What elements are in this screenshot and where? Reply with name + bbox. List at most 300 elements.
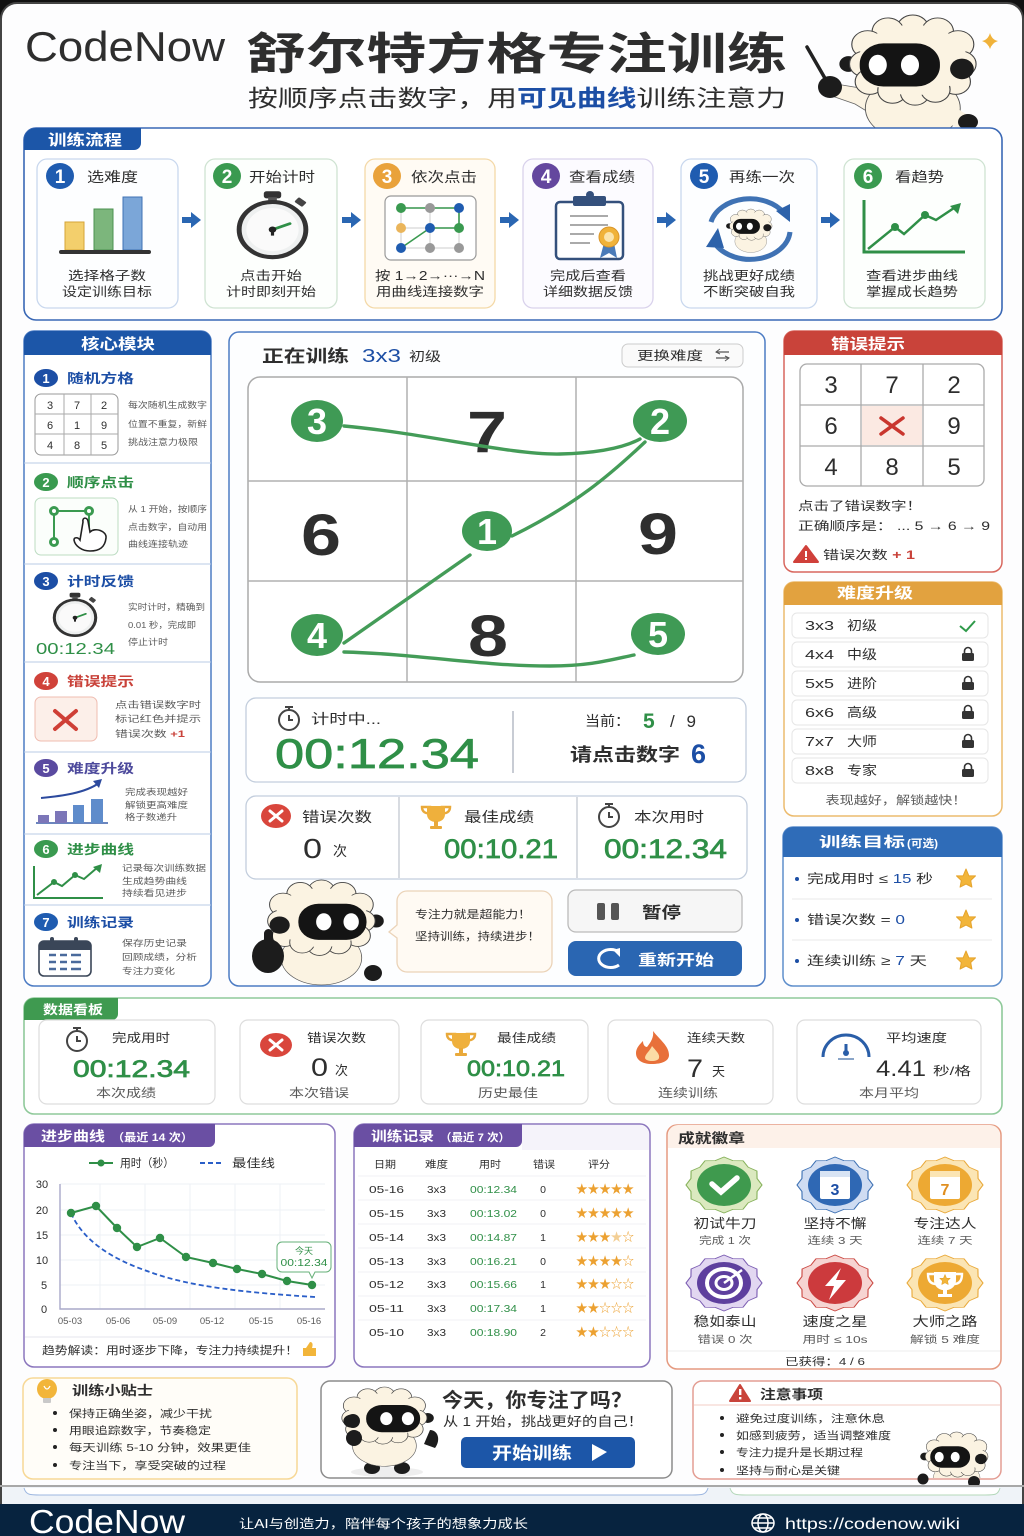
panel: cautions xyxy=(693,1381,1001,1495)
module 7: 回顾成绩，分析 xyxy=(122,952,198,962)
header: (可选) xyxy=(907,836,938,850)
table rows: 00:15.66 xyxy=(470,1279,517,1291)
step 1: 选难度 xyxy=(87,169,138,185)
step 3 xyxy=(365,159,495,308)
level rows: 中级 xyxy=(847,647,877,662)
error grid: 7 xyxy=(885,372,899,399)
mascot with pointer xyxy=(807,15,978,140)
arrow xyxy=(821,212,840,228)
goal: errors: 错误次数 = 0 xyxy=(807,912,905,927)
module 5 xyxy=(34,759,189,823)
table header xyxy=(374,1158,610,1171)
error grid: 9 xyxy=(947,413,961,440)
line chart: 05-09 xyxy=(153,1316,177,1327)
error grid: 5 xyxy=(947,454,961,481)
module 3: 计时反馈 xyxy=(67,574,134,589)
mascot: thumbs up xyxy=(252,880,384,985)
line chart: 0 xyxy=(41,1304,47,1316)
table rows: 3x3 xyxy=(427,1327,446,1339)
module 3: 0.01 秒，完成即 xyxy=(128,620,196,630)
badge: 速度之星: 用时 ≤ 10s xyxy=(802,1334,868,1346)
level rows: 初级 xyxy=(847,618,877,633)
module 1: 挑战注意力极限 xyxy=(128,437,199,447)
table header: 日期 xyxy=(374,1159,396,1171)
table rows: 2 xyxy=(540,1327,546,1339)
module 1: 4 xyxy=(47,440,53,452)
module 7: 专注力变化 xyxy=(122,966,176,976)
table rows: 3x3 xyxy=(427,1303,446,1315)
table rows: 05-10 xyxy=(369,1327,404,1339)
module 1: 9 xyxy=(101,420,107,432)
table header: 错误 xyxy=(533,1158,555,1171)
module 5: 完成表现越好 xyxy=(125,787,189,797)
table rows: 05-16 xyxy=(369,1184,404,1196)
arrow xyxy=(182,212,201,228)
sparkle xyxy=(982,33,998,49)
step 4: 查看成绩 xyxy=(569,169,635,185)
game grid xyxy=(248,377,743,682)
tip list xyxy=(53,1407,252,1472)
card: speed xyxy=(797,1020,981,1104)
speech bubble: 坚持训练，持续进步！ xyxy=(415,929,540,943)
level rows: 专家 xyxy=(847,763,877,778)
goal: time xyxy=(795,869,976,887)
clicked markers: 1 xyxy=(477,511,497,552)
module 4: 标记红色并提示 xyxy=(115,713,201,724)
step 2: 计时即刻开始 xyxy=(226,285,317,299)
tab: 数据看板 xyxy=(43,1002,104,1017)
line chart: 20 xyxy=(36,1205,48,1217)
level rows xyxy=(792,613,988,783)
table rows: 05-15 xyxy=(369,1208,404,1220)
badge: 专注达人 xyxy=(907,1157,983,1247)
badge: 坚持不懈: 坚持不懈 xyxy=(804,1216,866,1231)
table rows xyxy=(369,1182,634,1339)
badge: 稳如泰山 xyxy=(686,1255,762,1346)
clicked markers: 4 xyxy=(307,615,327,656)
stat: errors: 次 xyxy=(333,843,347,859)
table rows: 0 xyxy=(540,1184,546,1196)
module 6 xyxy=(34,840,207,898)
badge: 坚持不懈 xyxy=(797,1157,873,1247)
module 4: 4 xyxy=(42,674,50,689)
badge: 专注达人: 7 xyxy=(941,1182,950,1199)
tips heading: 训练小贴士 xyxy=(72,1383,153,1398)
tip list: 专注当下，享受突破的过程 xyxy=(69,1459,227,1472)
card: time xyxy=(39,1020,215,1104)
line chart: 05-03 xyxy=(58,1316,82,1327)
module 7: 7 xyxy=(42,915,50,930)
module 1: 5 xyxy=(101,440,107,452)
level rows: 3x3 xyxy=(805,618,834,633)
panel: training records xyxy=(354,1124,650,1367)
header: 成就徽章 xyxy=(678,1130,745,1146)
module 2: 顺序点击 xyxy=(67,475,134,490)
module 1: 2 xyxy=(101,400,107,412)
module 1: 位置不重复，新鲜 xyxy=(128,419,208,429)
table rows: ★★★★★ xyxy=(576,1206,634,1220)
goal: streak xyxy=(795,951,976,969)
button: start xyxy=(461,1437,635,1468)
module 2: 曲线连接轨迹 xyxy=(128,539,189,549)
line chart: 05-15 xyxy=(249,1316,273,1327)
tab: （最近 14 次） xyxy=(112,1130,193,1144)
step 5: 5 xyxy=(699,167,710,188)
table rows: 00:14.87 xyxy=(470,1232,517,1244)
card: best: 最佳成绩 xyxy=(497,1031,556,1045)
training header: 3x3 xyxy=(362,346,401,366)
header: 训练目标 xyxy=(819,834,905,850)
panel: error hint xyxy=(784,331,1002,572)
table rows: 1 xyxy=(540,1232,546,1244)
module 3 xyxy=(34,572,205,658)
table rows: 05-12 xyxy=(369,1279,404,1291)
module 6: 持续看见进步 xyxy=(122,888,187,898)
error message: 点击了错误数字！ xyxy=(798,498,922,513)
card: streak: 7 xyxy=(687,1055,703,1083)
timer box: / 9 xyxy=(670,712,696,731)
stat: errors: 0 xyxy=(303,833,322,864)
card: speed: 4.41 xyxy=(876,1056,926,1081)
module 1: 8 xyxy=(74,440,80,452)
module 7 xyxy=(34,913,198,976)
table rows: 00:17.34 xyxy=(470,1303,517,1315)
module 5: 解锁更高难度 xyxy=(125,800,189,810)
clicked markers: 3 xyxy=(307,401,327,442)
module 4: 点击错误数字时 xyxy=(115,699,201,710)
step 6: 看趋势 xyxy=(895,169,944,185)
tab: 进步曲线 xyxy=(41,1128,106,1144)
grid numbers: 7 xyxy=(467,400,507,465)
panel: goals xyxy=(783,827,1002,986)
step 2: 开始计时 xyxy=(249,169,315,185)
button: change difficulty: 更换难度 xyxy=(637,348,704,363)
step 5: 挑战更好成绩 xyxy=(703,269,796,283)
tip list: 保持正确坐姿，减少干扰 xyxy=(69,1407,213,1420)
table rows: 00:16.21 xyxy=(470,1256,517,1268)
tab xyxy=(24,1124,215,1147)
module 1: 1 xyxy=(74,420,80,432)
button: restart: 重新开始 xyxy=(638,951,714,969)
module 2: 点击数字，自动用 xyxy=(128,522,207,532)
tip list: 每天训练 5-10 分钟，效果更佳 xyxy=(69,1441,252,1454)
level rows: 6x6 xyxy=(805,705,834,720)
subtitle: 按顺序点击数字，用 可见曲线 训练注意力 xyxy=(248,85,786,111)
module 5: 格子数递升 xyxy=(125,812,178,822)
card: time: 本次成绩 xyxy=(96,1086,156,1100)
panel: data dashboard xyxy=(24,998,1002,1114)
table rows: 05-11 xyxy=(369,1303,404,1315)
error message: 正确顺序是： ... 5 → 6 → 9 xyxy=(798,518,990,533)
tab: 训练流程 xyxy=(24,128,141,150)
card: best xyxy=(421,1020,588,1104)
grid numbers xyxy=(301,400,678,669)
panel: achievement badges xyxy=(667,1125,1001,1369)
header: 错误提示 xyxy=(831,336,905,353)
url: https://codenow.wiki xyxy=(785,1516,960,1533)
line chart xyxy=(36,1179,331,1327)
earned count: 已获得：4 / 6 xyxy=(785,1356,865,1368)
callout: today: 今天 xyxy=(295,1245,313,1256)
line chart: 5 xyxy=(41,1280,47,1292)
module 4 xyxy=(34,672,201,741)
mascot: waving xyxy=(342,1387,438,1477)
step 5 xyxy=(681,159,817,308)
step 1: 1 xyxy=(55,167,66,188)
button: restart xyxy=(568,941,742,976)
step 2: 点击开始 xyxy=(240,269,303,283)
stat: current: 本次用时 xyxy=(634,809,704,825)
error grid xyxy=(800,364,984,486)
line chart: 30 xyxy=(36,1179,48,1191)
panel: core modules xyxy=(24,331,211,986)
module 1: 3 xyxy=(47,400,53,412)
badge: 大师之路: 解锁 5 难度 xyxy=(910,1333,980,1346)
header xyxy=(25,15,998,140)
timer box: 00:12.34 xyxy=(275,730,479,777)
step 5: 不断突破自我 xyxy=(703,284,796,299)
badge: 初试牛刀 xyxy=(686,1157,762,1247)
module 6: 记录每次训练数据 xyxy=(122,863,207,873)
header: 难度升级 xyxy=(837,584,913,602)
bottom strip xyxy=(0,1486,1024,1504)
legend xyxy=(89,1156,276,1170)
step 1 xyxy=(37,159,178,308)
icon: globe xyxy=(752,1514,774,1532)
caution list: 专注力提升是长期过程 xyxy=(736,1446,864,1459)
callout: today xyxy=(277,1242,331,1278)
module 1: 7 xyxy=(74,400,80,412)
badge: 专注达人: 连续 7 天 xyxy=(918,1234,972,1247)
step 6 xyxy=(844,159,985,308)
header xyxy=(784,582,1002,605)
panel: tips xyxy=(23,1378,297,1479)
module 2 xyxy=(34,473,208,555)
level rows: 进阶 xyxy=(847,676,877,691)
module 1: 6 xyxy=(47,420,53,432)
table header: 用时 xyxy=(479,1159,501,1171)
module 3: 00:12.34 xyxy=(36,641,115,658)
icon: warning xyxy=(730,1385,750,1401)
button: start: 开始训练 xyxy=(492,1443,572,1463)
timer box: 计时中... xyxy=(311,711,381,727)
table rows: 3x3 xyxy=(427,1256,446,1268)
error message: 错误次数 + 1 xyxy=(823,547,915,562)
clicked markers xyxy=(291,400,687,656)
grid numbers: 9 xyxy=(638,502,678,567)
card: streak: 天 xyxy=(712,1064,725,1079)
table rows: 3x3 xyxy=(427,1184,446,1196)
training header xyxy=(262,346,441,366)
arrow xyxy=(342,212,361,228)
cautions heading: 注意事项 xyxy=(760,1387,823,1402)
title: 舒尔特方格专注训练 xyxy=(246,30,787,79)
step 6: 6 xyxy=(863,167,873,188)
module 2: 2 xyxy=(42,475,50,490)
step 1: 选择格子数 xyxy=(68,268,147,283)
trend note xyxy=(42,1342,316,1357)
error grid: 4 xyxy=(824,454,838,481)
tab: 训练记录 xyxy=(371,1128,434,1144)
line chart: 15 xyxy=(36,1230,48,1242)
table rows: ★★★★★ xyxy=(576,1182,634,1196)
table rows: 05-13 xyxy=(369,1256,404,1268)
table rows: 0 xyxy=(540,1208,546,1220)
timer box: 6 xyxy=(691,739,706,769)
table rows: 3x3 xyxy=(427,1208,446,1220)
step 2 xyxy=(205,159,337,308)
badge: 坚持不懈: 连续 3 天 xyxy=(808,1234,862,1247)
module 5: 5 xyxy=(42,761,50,776)
timer box: 5 xyxy=(643,710,655,733)
table rows: 1 xyxy=(540,1303,546,1315)
training header: 正在训练 xyxy=(262,346,349,366)
CTA subtext: 从 1 开始，挑战更好的自己！ xyxy=(443,1414,643,1429)
header: 核心模块 xyxy=(24,331,211,355)
panel: training flow xyxy=(24,128,1002,320)
module 6: 6 xyxy=(42,842,50,857)
stat: current xyxy=(599,804,727,864)
table rows: 00:18.90 xyxy=(470,1327,517,1339)
stat: errors: 错误次数 xyxy=(302,809,372,825)
card: errors: 0 xyxy=(311,1054,328,1082)
level rows: 8x8 xyxy=(805,763,834,778)
step 2: 2 xyxy=(222,167,232,188)
grid numbers: 8 xyxy=(468,604,508,669)
legend: 最佳线 xyxy=(232,1156,276,1170)
module 1: 1 xyxy=(42,371,50,386)
header xyxy=(668,1125,1000,1148)
line chart: 05-12 xyxy=(200,1316,224,1327)
button: pause xyxy=(568,890,742,932)
table rows: ★★☆☆☆ xyxy=(576,1325,634,1339)
module 6: 进步曲线 xyxy=(67,842,134,857)
button: pause: 暂停 xyxy=(642,903,681,922)
stat: best: 00:10.21 xyxy=(444,834,558,864)
timer box: 当前： xyxy=(585,713,630,729)
timer box xyxy=(246,698,746,782)
legend: 用时（秒） xyxy=(120,1156,174,1170)
step 1: 设定训练目标 xyxy=(62,284,152,299)
module 3: 停止计时 xyxy=(128,637,169,647)
badge: 初试牛刀: 完成 1 次 xyxy=(699,1234,751,1247)
panel: progress curve xyxy=(24,1124,335,1367)
callout: today: 00:12.34 xyxy=(280,1257,328,1269)
slogan: 让AI与创造力，陪伴每个孩子的想象力成长 xyxy=(239,1516,529,1531)
module 3: 3 xyxy=(42,574,50,589)
badge: 初试牛刀: 初试牛刀 xyxy=(694,1216,756,1231)
line chart: 05-06 xyxy=(106,1316,130,1327)
level rows: 高级 xyxy=(847,705,877,720)
table rows: 1 xyxy=(540,1279,546,1291)
badge: 大师之路 xyxy=(907,1255,983,1346)
level rows: 4x4 xyxy=(805,647,834,662)
level rows: 7x7 xyxy=(805,734,834,749)
card: time: 完成用时 xyxy=(112,1030,170,1045)
card: errors: 次 xyxy=(335,1063,348,1078)
module 2: 从 1 开始，按顺序 xyxy=(128,504,208,514)
module 7: 训练记录 xyxy=(67,915,134,930)
step 3: 依次点击 xyxy=(411,169,477,185)
mascot: peeking xyxy=(918,1432,988,1485)
header: 核心模块: 核心模块 xyxy=(81,335,155,353)
trend note: 趋势解读：用时逐步下降，专注力持续提升！ xyxy=(42,1343,298,1357)
table header: 难度 xyxy=(425,1158,448,1171)
table rows: 00:12.34 xyxy=(470,1184,517,1196)
line chart: 10 xyxy=(36,1255,48,1267)
goal: time: 完成用时 ≤ 15 秒 xyxy=(807,871,933,886)
level rows: 大师 xyxy=(847,734,877,749)
clicked markers: 2 xyxy=(650,401,670,442)
table rows: 3x3 xyxy=(427,1232,446,1244)
line chart: 05-16 xyxy=(297,1316,321,1327)
caution list xyxy=(720,1412,892,1477)
module 4: 错误次数 +1 xyxy=(115,728,185,739)
table rows: ★★☆☆☆ xyxy=(576,1301,634,1315)
table rows: ★★★☆☆ xyxy=(576,1277,634,1291)
arrow xyxy=(657,212,676,228)
module 7: 保存历史记录 xyxy=(122,938,188,948)
module 6: 生成趋势曲线 xyxy=(122,876,188,886)
table header: 评分 xyxy=(588,1159,610,1171)
caution list: 坚持与耐心是关键 xyxy=(736,1464,841,1477)
module 4: 错误提示 xyxy=(67,674,134,689)
module 1: 每次随机生成数字 xyxy=(128,400,207,410)
badge: 速度之星: 速度之星 xyxy=(802,1314,868,1329)
error grid: 3 xyxy=(824,372,838,399)
step 4: 详细数据反馈 xyxy=(543,284,633,299)
card: speed: 秒/格 xyxy=(933,1063,971,1078)
table rows: ★★★★☆ xyxy=(576,1230,634,1244)
stat: current: 00:12.34 xyxy=(604,834,727,864)
table rows: 0 xyxy=(540,1256,546,1268)
table rows: ★★★★☆ xyxy=(576,1254,634,1268)
card: best: 历史最佳 xyxy=(478,1086,538,1100)
level rows: 5x5 xyxy=(805,676,834,691)
caption: 表现越好，解锁越快！ xyxy=(826,793,966,807)
card: errors: 本次错误 xyxy=(289,1086,349,1100)
card: streak: 连续训练 xyxy=(658,1085,718,1100)
step 4: 完成后查看 xyxy=(550,268,626,283)
error message xyxy=(794,498,990,562)
goal: streak: 连续训练 ≥ 7 天 xyxy=(807,953,928,968)
CTA heading: 今天，你专注了吗？ xyxy=(442,1388,632,1412)
training header: 初级 xyxy=(409,349,441,364)
stat: best: 最佳成绩 xyxy=(464,809,534,825)
icon: bulb xyxy=(37,1379,57,1403)
module 5: 难度升级 xyxy=(67,761,134,776)
card: streak xyxy=(608,1020,773,1104)
panel: main training xyxy=(229,332,765,986)
badge: 专注达人: 专注达人 xyxy=(914,1216,976,1231)
table rows: 00:13.02 xyxy=(470,1208,517,1220)
table rows: 3x3 xyxy=(427,1279,446,1291)
stat: best xyxy=(422,806,558,864)
badge: 大师之路: 大师之路 xyxy=(912,1314,978,1329)
tab: 训练流程: 训练流程 xyxy=(48,131,122,149)
card: streak: 连续天数 xyxy=(687,1030,745,1045)
timer box: 请点击数字 xyxy=(570,744,680,765)
badge: 速度之星 xyxy=(797,1255,873,1346)
badge: 稳如泰山: 错误 0 次 xyxy=(698,1333,752,1346)
step 6: 查看进步曲线 xyxy=(866,269,959,283)
card: speed: 平均速度 xyxy=(886,1030,947,1045)
error grid: 8 xyxy=(885,454,899,481)
badge: 坚持不懈: 3 xyxy=(831,1182,840,1199)
tab xyxy=(24,998,118,1020)
logo: CodeNow: CodeNow xyxy=(25,23,226,70)
module 1: 随机方格 xyxy=(67,371,134,386)
